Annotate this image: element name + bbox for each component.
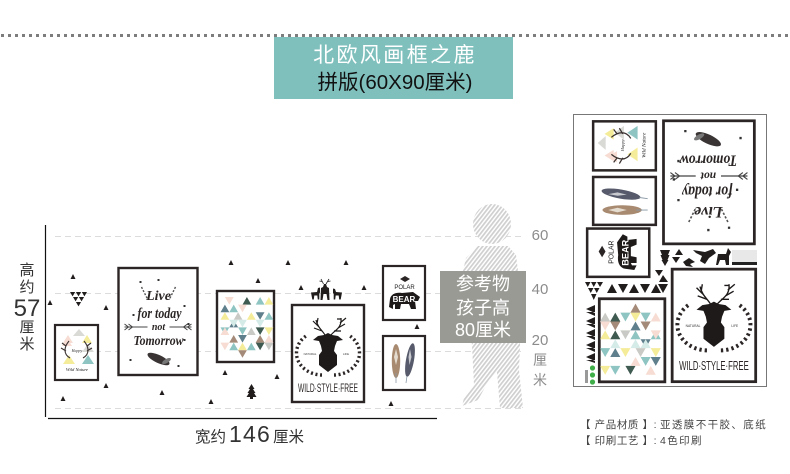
sheet frame: antler — [593, 121, 656, 170]
height label: 米 — [19, 336, 35, 353]
product specs: 4色印刷 — [660, 434, 703, 447]
height label: 高 — [19, 262, 35, 279]
width label: 宽约146厘米 — [195, 421, 304, 447]
child height callout: 80厘米 — [455, 320, 511, 340]
frame: polar bear print — [383, 266, 425, 320]
height scale numbers: 厘 — [533, 352, 547, 368]
title banner — [274, 37, 513, 99]
dotted top divider — [1, 34, 790, 37]
product specs: 亚透膜不干胶、底纸 — [660, 418, 767, 431]
frame: triangle mosaic print — [217, 291, 274, 362]
height label: 厘 — [19, 319, 35, 336]
tree sticker — [246, 384, 256, 399]
frame: antler print — [55, 325, 98, 380]
triangle cluster sticker — [70, 292, 87, 306]
height scale numbers: 40 — [532, 281, 548, 298]
title banner: 拼版(60X90厘米) — [318, 71, 472, 94]
sheet frame: lettering — [664, 121, 754, 244]
child height callout: 孩子高 — [456, 298, 510, 318]
height label: 约 — [19, 279, 35, 296]
dimension axes — [46, 225, 437, 418]
height scale numbers: 20 — [532, 332, 548, 349]
child height callout: 参考物 — [456, 274, 510, 294]
height scale numbers — [532, 227, 548, 388]
barcode mark — [585, 370, 588, 383]
child reference silhouette — [462, 204, 523, 408]
product specs: 【 印刷工艺 】: — [580, 435, 657, 447]
product specs: 【 产品材质 】: — [580, 419, 657, 431]
frame: lettering print — [118, 268, 198, 375]
panel: layout sheet — [574, 114, 766, 386]
sheet frame: deer — [672, 269, 756, 382]
frame: deer wreath print — [292, 305, 364, 402]
height reference grid lines — [55, 236, 522, 408]
product specs — [580, 418, 767, 447]
sheet frame: feathers — [593, 177, 656, 225]
child height callout — [440, 271, 526, 343]
height scale numbers: 米 — [533, 372, 547, 388]
sheet frame: mosaic — [599, 299, 665, 382]
wall triangle stickers — [48, 260, 420, 406]
deer family sticker — [311, 279, 342, 300]
sheet print label — [732, 250, 757, 265]
title banner: 北欧风画框之鹿 — [313, 44, 477, 67]
height label: 57 — [14, 295, 40, 322]
sheet frame: polar bear — [587, 229, 649, 277]
sheet small stickers — [585, 248, 731, 363]
frame: feather print — [383, 336, 425, 390]
colour registration dots — [590, 365, 595, 385]
height label — [14, 262, 40, 353]
height scale numbers: 60 — [532, 227, 548, 244]
